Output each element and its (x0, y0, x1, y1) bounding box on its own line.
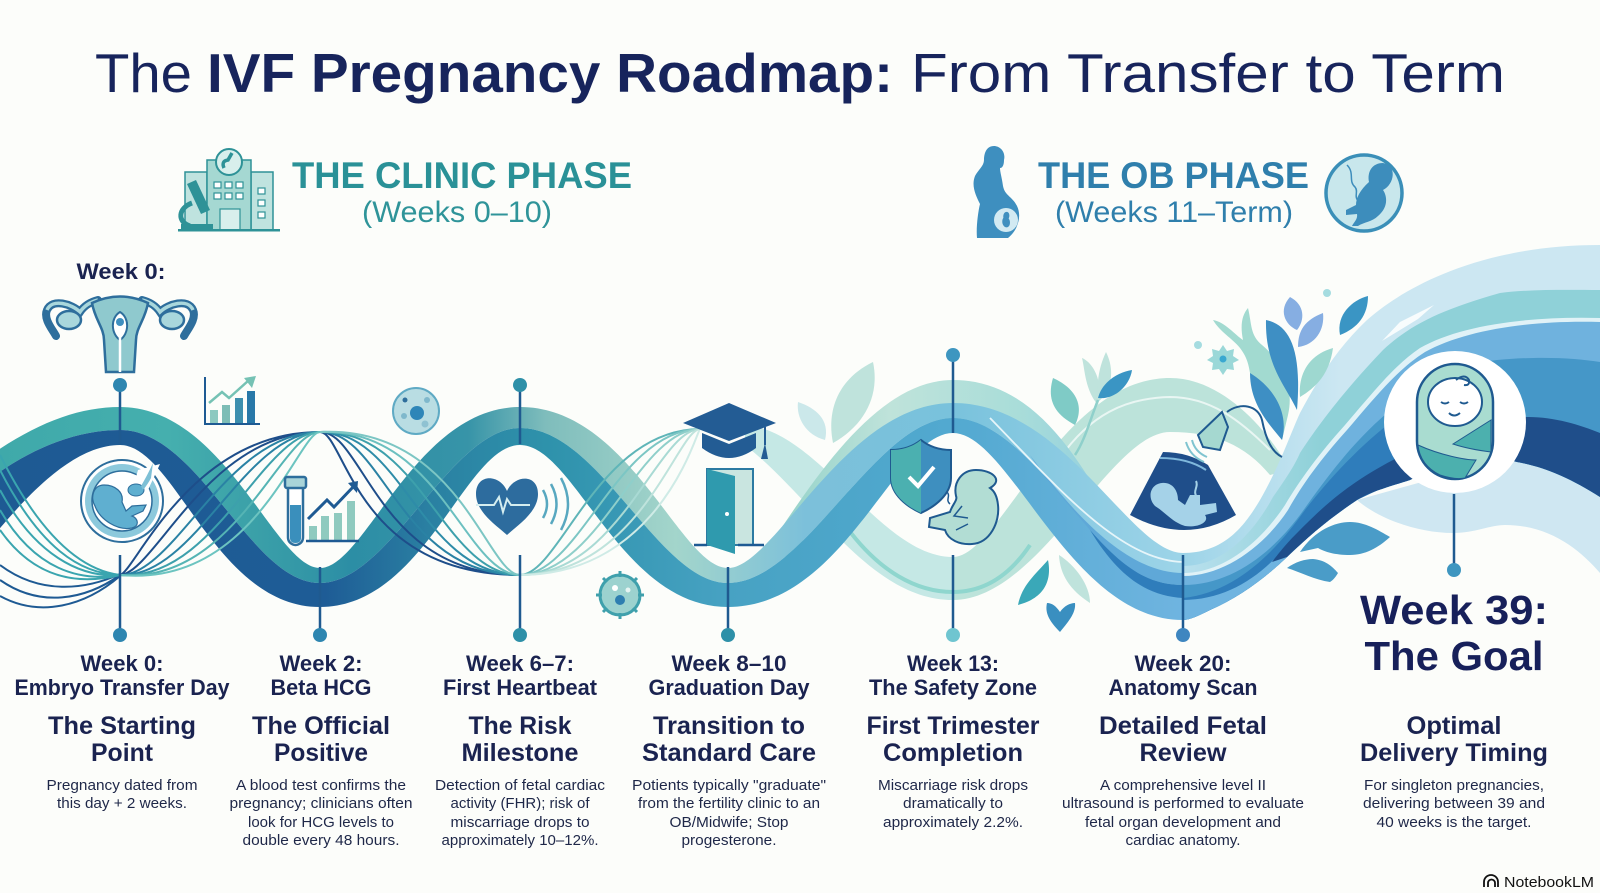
title: IVF Pregnancy Roadmap: (207, 42, 893, 104)
milestone: week 13: dramatically to (903, 795, 1003, 812)
milestone: week 20: Detailed Fetal (1099, 712, 1267, 740)
OB phase header (974, 146, 1402, 238)
milestone: week 8-10 (632, 651, 826, 849)
pin: week 39 (1447, 494, 1461, 577)
milestone: week 39: Delivery Timing (1360, 739, 1548, 767)
milestone: week 13: Miscarriage risk drops (878, 777, 1028, 794)
title: The (95, 42, 192, 104)
ribbon: teal (1183, 290, 1600, 620)
leaf cluster: bottom centre (1018, 555, 1090, 632)
milestone: week 20: ultrasound is performed to evaluate (1062, 795, 1304, 812)
ribbon: pale top (1183, 245, 1600, 620)
icon: pregnant woman (974, 146, 1019, 238)
icon: cell (393, 388, 439, 434)
ribbon: helix lower lane (0, 418, 1183, 620)
OB phase header: THE OB PHASE (1038, 155, 1309, 196)
milestone: week 0: this day + 2 weeks. (57, 795, 187, 812)
pin: week 13 (946, 348, 960, 642)
milestone: week 2 (230, 651, 412, 849)
milestone: week 13: The Safety Zone (869, 675, 1037, 700)
ribbon: descending blue strips (990, 418, 1183, 598)
OB phase header: (Weeks 11–Term) (1055, 196, 1293, 229)
milestone: week 39: delivering between 39 and (1363, 795, 1545, 812)
leaf cluster: lower right (1287, 522, 1390, 582)
milestone: week 2: double every 48 hours. (242, 832, 400, 849)
sweeping ribbons to term (1183, 245, 1600, 620)
icon: shield with check (891, 440, 951, 513)
milestone: week 8-10: Week 8–10 (672, 651, 786, 676)
milestone: week 6-7: miscarriage drops to (450, 814, 590, 831)
icon: embryo ring (81, 460, 163, 542)
milestone: week 39: For singleton pregnancies, (1364, 777, 1544, 794)
helix ribbons (0, 378, 1290, 620)
milestone: week 8-10: Graduation Day (648, 675, 810, 700)
ribbon: pale lower sweep (1357, 455, 1600, 573)
ribbon: deep blue (1183, 415, 1420, 620)
milestone: week 20: A comprehensive level II (1100, 777, 1266, 794)
ribbon: pale green outer lane (770, 380, 1125, 590)
milestone: week 6-7 (435, 651, 606, 849)
pins (113, 348, 1190, 642)
icon: ultrasound scan (1130, 406, 1282, 530)
icon: fetus (929, 470, 998, 544)
milestone: week 8-10: Potients typically "graduate" (632, 777, 826, 794)
milestone: week 20: fetal organ development and (1085, 814, 1281, 831)
milestone: week 0 (14, 651, 230, 812)
ribbon: mid blue (1183, 358, 1600, 620)
milestone: week 0: Point (91, 739, 154, 767)
leaf cluster: centre plant (1051, 352, 1132, 455)
ribbon: navy (1272, 417, 1600, 562)
milestone: week 6-7: Detection of fetal cardiac (435, 777, 606, 794)
ribbon: light underside (1183, 545, 1287, 620)
milestone: week 39: The Goal (1364, 633, 1544, 679)
milestone: week 20: cardiac anatomy. (1126, 832, 1240, 849)
milestone: week 13: First Trimester (866, 712, 1040, 740)
milestone: week 8-10: Standard Care (642, 739, 816, 767)
milestone: week 13 (866, 651, 1040, 831)
icon: graduation cap (683, 403, 776, 459)
icon: test tube and chart (285, 477, 359, 545)
ribbon: periwinkle (1183, 322, 1600, 620)
milestone: week 6-7: Week 6–7: (466, 651, 574, 676)
milestone: week 8-10: OB/Midwife; Stop (670, 814, 788, 831)
milestone: week 6-7: The Risk (468, 712, 572, 740)
icon: uterus (46, 296, 194, 372)
milestone: week 2: Week 2: (280, 651, 362, 676)
milestone: week 39: Week 39: (1360, 587, 1548, 633)
title: From Transfer to Term (911, 42, 1505, 104)
clinic phase header: THE CLINIC PHASE (292, 155, 632, 196)
icon: virus-like cell (596, 571, 644, 619)
milestone: week 39 (1360, 587, 1548, 831)
milestone: week 6-7: approximately 10–12%. (442, 832, 598, 849)
leaf cluster: left of week 13 (798, 362, 875, 443)
milestone: week 2: pregnancy; clinicians often (230, 795, 412, 812)
milestone: week 6-7: First Heartbeat (443, 675, 598, 700)
milestone: week 0: Week 0: (80, 651, 164, 676)
milestone: week 8-10: from the fertility clinic to an (638, 795, 820, 812)
milestone: week 13: Week 13: (907, 651, 999, 676)
icon: fetus circle (1326, 155, 1402, 231)
NotebookLM logo: NotebookLM (1504, 874, 1594, 891)
pin: week 6-7 (513, 378, 527, 642)
ribbon: helix upper lane (0, 403, 1183, 590)
milestone: week 8-10: progesterone. (682, 832, 776, 849)
milestone: week 13: approximately 2.2%. (883, 814, 1023, 831)
pin: week 8-10 (721, 567, 735, 642)
milestone: week 20: Review (1140, 739, 1227, 767)
milestone: week 0: Pregnancy dated from (46, 777, 198, 794)
pin: week 20 (1176, 555, 1190, 642)
title (95, 42, 1505, 104)
milestone: week 0: The Starting (48, 712, 196, 740)
icon: small bar chart (205, 376, 260, 424)
milestone: week 2: Positive (274, 739, 368, 767)
milestone: week 39: Optimal (1406, 712, 1502, 740)
milestone: week 6-7: Milestone (462, 739, 579, 767)
clinic phase header: (Weeks 0–10) (362, 196, 552, 229)
milestone: week 6-7: activity (FHR); risk of (450, 795, 590, 812)
leaf cluster: upper right plant (1194, 289, 1368, 440)
icon: swaddled baby (1384, 351, 1526, 493)
pin: week 0 (113, 378, 127, 642)
icon: heart with heartbeat (476, 478, 568, 535)
milestone: week 20 (1062, 651, 1304, 849)
milestone: week 8-10: Transition to (653, 712, 805, 740)
milestone: week 20: Week 20: (1134, 651, 1232, 676)
thin strand bundles (0, 429, 700, 607)
pin: week 2 (313, 567, 327, 642)
icon: clinic building with microscope (178, 149, 280, 232)
milestone: week 39: 40 weeks is the target. (1376, 814, 1532, 831)
leaves (798, 289, 1390, 632)
milestone: week 2: look for HCG levels to (248, 814, 394, 831)
milestone: week 20: Anatomy Scan (1108, 675, 1258, 700)
ribbon: pale green counter wave (745, 378, 1290, 600)
milestone: week 2: The Official (252, 712, 390, 740)
milestone: week 2: Beta HCG (270, 675, 372, 700)
milestone: week 2: A blood test confirms the (236, 777, 406, 794)
ribbon: pale divider (1183, 318, 1600, 620)
clinic phase header (178, 149, 632, 232)
icon: open door (694, 469, 764, 554)
top week label: Week 0: (76, 259, 166, 284)
milestone: week 0: Embryo Transfer Day (14, 675, 230, 700)
milestone: week 13: Completion (883, 739, 1023, 767)
